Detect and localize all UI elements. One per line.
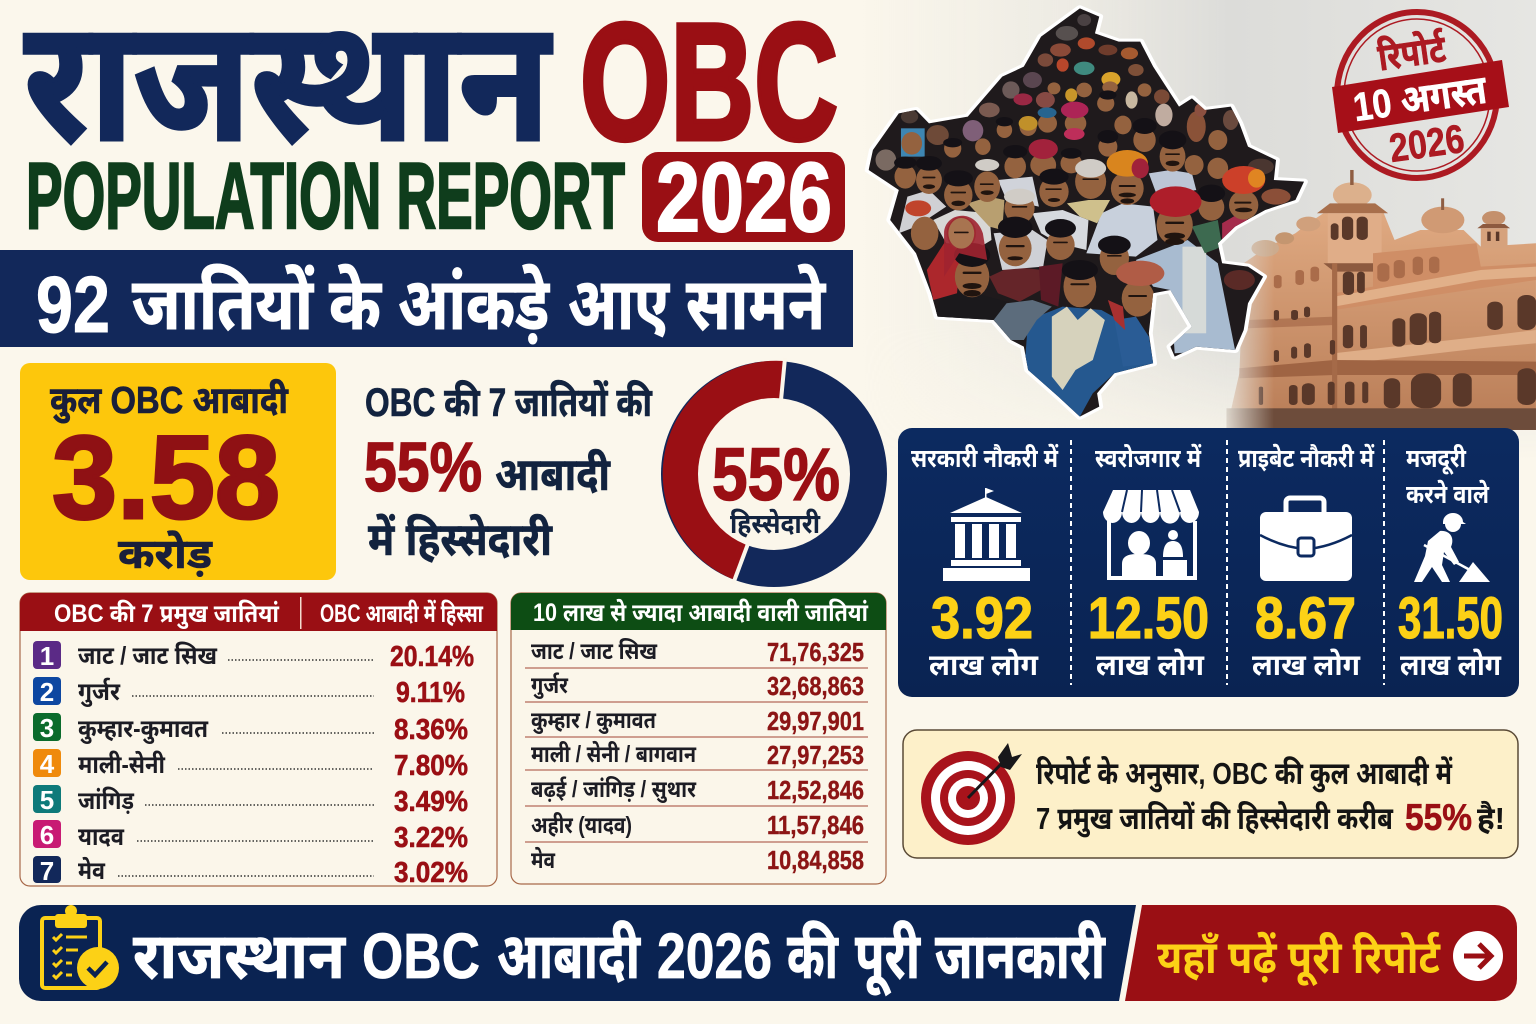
footer bar: full information: आबादी (497, 920, 641, 992)
banner: 92 castes: जातियों (132, 264, 315, 345)
row 2: 2 (40, 677, 54, 707)
row 4 (33, 749, 468, 782)
row 1: 1 (40, 641, 54, 671)
table: castes over 10 lakh: 29,97,901 (767, 706, 864, 736)
row 6: 3.22% (394, 822, 468, 854)
palace illustration (1226, 170, 1536, 430)
row 3: कुम्हार-कुमावत (78, 715, 208, 744)
table: castes over 10 lakh: गुर्जर (531, 672, 569, 699)
column: self employment: लाख लोग (1096, 648, 1204, 682)
icon: government building (943, 488, 1030, 581)
column: private jobs: प्राइबेट नौकरी में (1238, 443, 1375, 473)
footer bar: full information: राजस्थान (133, 920, 347, 992)
table: castes over 10 lakh: बढ़ई / जांगिड़ / सुथार (531, 776, 697, 803)
footer bar: full information (19, 905, 1136, 1001)
table: castes over 10 lakh: 10,84,858 (767, 845, 864, 875)
text block: 55% share (364, 380, 653, 565)
column: government jobs: लाख लोग (929, 648, 1038, 682)
row 1: 20.14% (390, 641, 474, 673)
column: government jobs (911, 443, 1059, 682)
footer bar: full information: जानकारी (935, 920, 1106, 992)
row 4: 4 (40, 749, 55, 779)
upper crowd mosaic (876, 14, 1291, 290)
column: self employment: 12.50 (1088, 586, 1209, 651)
table: castes over 10 lakh: 10 लाख से ज्यादा आबादी वाली जातियां (533, 598, 869, 627)
row 5: 3.49% (394, 786, 468, 818)
callout: 55% statement (903, 730, 1518, 858)
footer bar: full information: की (787, 920, 839, 992)
donut chart: 55%: हिस्सेदारी (730, 508, 821, 539)
facial features (923, 153, 1252, 297)
table: castes over 10 lakh: अहीर (यादव) (531, 812, 632, 838)
row 1: जाट / जाट सिख (78, 641, 218, 670)
badge: 2026: 2026 (656, 142, 832, 252)
icon: target with arrow (921, 743, 1022, 845)
table: castes over 10 lakh: 71,76,325 (767, 637, 864, 667)
domes (1333, 182, 1372, 208)
table: castes over 10 lakh: जाट / जाट सिख (531, 638, 658, 664)
banner: 92 castes: आंकड़े (398, 264, 550, 345)
table: castes over 10 lakh: मेव (531, 847, 556, 873)
panel: total OBC population (20, 363, 336, 580)
floor bands (1334, 267, 1536, 307)
table: castes over 10 lakh: 27,97,253 (767, 740, 864, 770)
banner: 92 castes: के (329, 264, 382, 345)
banner: 92 castes: सामने (686, 264, 826, 345)
column: private jobs (1238, 443, 1375, 682)
row 5 (33, 785, 468, 818)
donut chart: 55% (661, 358, 887, 587)
footer button: read the full report (1125, 905, 1517, 1001)
row 5: 5 (40, 785, 54, 815)
footer bar: full information: पूरी (855, 920, 921, 997)
row 3 (33, 713, 468, 746)
panel: total OBC population: 3.58 (52, 412, 280, 544)
stamp band (1332, 60, 1509, 133)
stamp: report date (1332, 12, 1509, 178)
callout: 55% statement: 55% (1405, 797, 1472, 838)
column: private jobs: 8.67 (1255, 586, 1356, 651)
banner: 92 castes: आए (568, 265, 670, 345)
row 6 (33, 820, 468, 854)
windows (1259, 217, 1536, 408)
text block: 55% share: OBC की 7 जातियों की (365, 380, 653, 425)
row 7: 7 (40, 856, 54, 886)
subtitle: population report: POPULATION REPORT (26, 143, 625, 248)
text block: 55% share: में हिस्सेदारी (368, 512, 553, 565)
row 2: गुर्जर (78, 677, 121, 707)
panel: total OBC population: कुल OBC आबादी (50, 378, 289, 424)
callout: 55% statement: है! (1477, 801, 1505, 836)
column: labourers: लाख लोग (1400, 648, 1501, 682)
column: government jobs: सरकारी नौकरी में (911, 443, 1059, 473)
column: self employment: स्वरोजगार में (1095, 443, 1202, 473)
upper wall (1334, 243, 1536, 310)
callout: 55% statement: 7 प्रमुख जातियों की हिस्सेदारी करीब (1036, 801, 1394, 838)
icon: arrow (1453, 931, 1503, 981)
column: labourers (1398, 443, 1503, 682)
panel: total OBC population: करोड़ (118, 530, 213, 577)
column: labourers: मजदूरी (1406, 443, 1467, 475)
Rajasthan map made of a crowd (860, 0, 1334, 430)
row 3: 8.36% (394, 714, 468, 746)
stamp date: 10 अगस्त (1350, 68, 1490, 130)
panel: employment stats (898, 428, 1519, 697)
row 4: 7.80% (394, 750, 468, 782)
table: 7 major castes: OBC की 7 प्रमुख जातियां (54, 599, 280, 629)
row 6: यादव (78, 823, 125, 851)
banner: 92 castes: 92 (36, 260, 110, 349)
faces (894, 81, 1258, 317)
icon: clipboard checklist (42, 905, 119, 989)
column: self employment (1088, 443, 1209, 682)
footer button: read the full report: यहाँ पढ़ें पूरी रिपोर्ट (1157, 930, 1441, 987)
column: private jobs: लाख लोग (1252, 648, 1360, 682)
banner: 92 castes (0, 250, 853, 349)
table: castes over 10 lakh: 12,52,846 (767, 775, 864, 805)
icon: shop (1103, 490, 1199, 580)
row 3: 3 (40, 713, 54, 743)
icon: briefcase (1260, 498, 1352, 581)
table: castes over 10 lakh (511, 593, 886, 884)
row 2 (33, 677, 465, 709)
footer bar: full information: OBC (362, 920, 480, 992)
row 6: 6 (40, 820, 54, 850)
background (979, 0, 1536, 424)
table: castes over 10 lakh: माली / सेनी / बागवान (531, 741, 697, 767)
stamp top label: रिपोर्ट (1375, 26, 1449, 80)
hair and turbans (894, 90, 1265, 286)
row 1 (33, 641, 474, 673)
table: castes over 10 lakh: 11,57,846 (767, 810, 864, 840)
row 5: जांगिड़ (78, 786, 135, 815)
table: castes over 10 lakh: कुम्हार / कुमावत (531, 707, 657, 734)
row 2: 9.11% (396, 677, 465, 709)
column: government jobs: 3.92 (931, 586, 1033, 651)
table: castes over 10 lakh: 32,68,863 (767, 671, 864, 701)
icon: worker with shovel (1414, 513, 1490, 582)
table: 7 major castes: OBC आबादी में हिस्सा (320, 599, 483, 628)
text block: 55% share: आबादी (495, 448, 611, 500)
row 7 (33, 856, 468, 889)
donut chart: 55%: 55% (712, 433, 840, 516)
clothing (899, 170, 1248, 417)
stamp year: 2026 (1387, 117, 1467, 171)
row 7: मेव (78, 856, 106, 885)
column: labourers: करने वाले (1406, 479, 1490, 509)
footer bar: full information: 2026 (657, 920, 772, 992)
row 4: माली-सेनी (78, 750, 166, 779)
row 7: 3.02% (394, 857, 468, 889)
text block: 55% share: 55% (364, 428, 482, 506)
table: 7 major castes (20, 593, 497, 889)
